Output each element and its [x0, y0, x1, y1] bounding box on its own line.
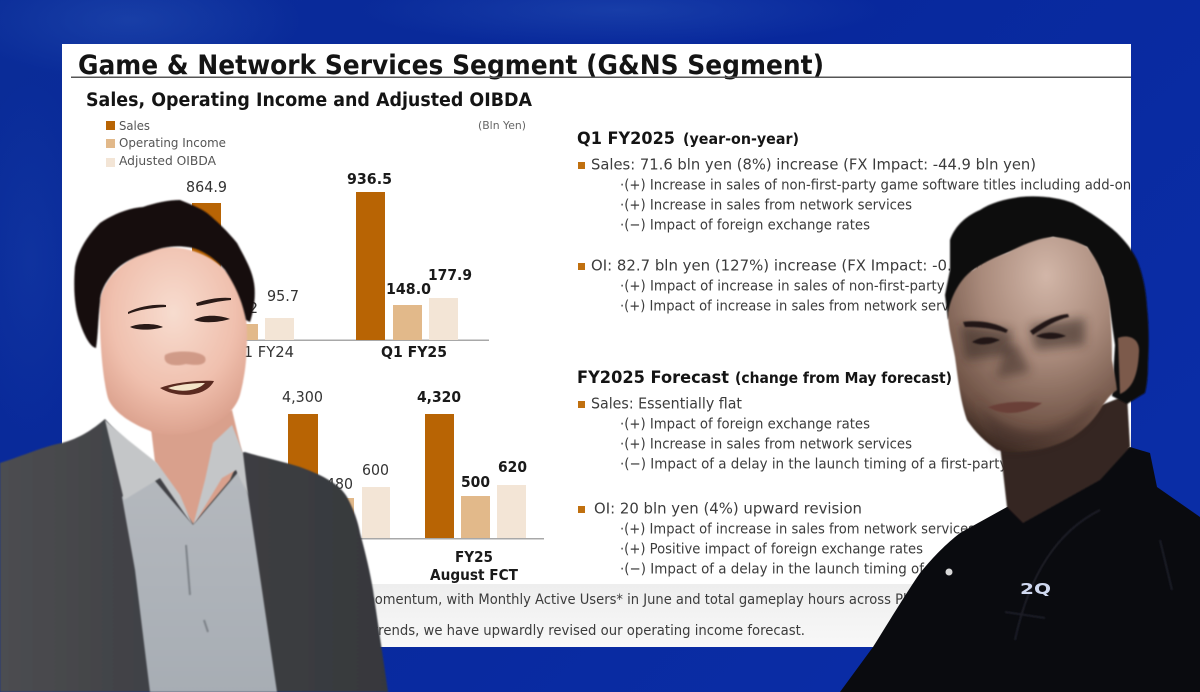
- summary box: [372, 584, 912, 640]
- shirt collar: [105, 420, 248, 526]
- forecast sales commentary: [578, 397, 1004, 472]
- eye shadow: [960, 318, 1085, 360]
- neck: [150, 410, 242, 524]
- placket: [186, 545, 208, 632]
- nose: [165, 351, 206, 365]
- Q1 operating income commentary: [578, 259, 982, 314]
- forecast operating income commentary: ·(−) Impact of a delay in the launch timing of a first-party title: [620, 562, 1038, 578]
- bar chart: full year forecast: 600: [362, 461, 389, 479]
- bar chart: quarterly: 148.0: [386, 280, 431, 298]
- forecast sales commentary: ·(−) Impact of a delay in the launch timing of a first-party title: [620, 456, 1038, 472]
- face: [948, 237, 1117, 452]
- mouth: [988, 402, 1042, 413]
- chart legend: Adjusted OIBDA: [119, 153, 216, 168]
- Q1 sales commentary: ·(+) Increase in sales of non-first-party game software titles including add-ons: [620, 178, 1138, 194]
- forecast sales commentary: ·(+) Impact of foreign exchange rates: [620, 416, 870, 432]
- bar chart: quarterly: 65.2: [225, 299, 258, 317]
- slide title: Game & Network Services Segment (G&NS Segment): [78, 50, 824, 81]
- bar chart: quarterly: 95.7: [267, 287, 299, 305]
- face: [100, 247, 247, 434]
- bar chart: full year forecast: 4,320: [417, 388, 461, 406]
- Q1 sales commentary: ·(+) Increase in sales from network services: [620, 198, 912, 214]
- lower face stubble shadow: [975, 395, 1100, 449]
- forecast operating income commentary: [578, 502, 974, 576]
- chart legend: Operating Income: [119, 135, 226, 150]
- bar chart: full year forecast: 480: [326, 475, 353, 493]
- forecast sales commentary: Sales: Essentially flat: [591, 394, 742, 412]
- chart legend: [106, 118, 226, 168]
- Q1 sales commentary: Sales: 71.6 bln yen (8%) increase (FX Impact: -44.9 bln yen): [591, 156, 1036, 174]
- slide panel: [62, 44, 1138, 647]
- hair: [945, 196, 1149, 404]
- chart legend: Sales: [119, 118, 150, 133]
- forecast operating income commentary: ·(+) Impact of increase in sales from network services: [620, 522, 975, 538]
- bar chart: quarterly: 936.5: [347, 170, 392, 188]
- brows and eyes: [128, 298, 231, 330]
- Q1 operating income commentary: OI: 82.7 bln yen (127%) increase (FX Impact: -0.7 bln yen): [591, 256, 1027, 274]
- Q1 operating income commentary: ·(+) Impact of increase in sales from network services: [620, 298, 975, 314]
- bar chart: quarterly: Q1 FY25: [381, 343, 447, 361]
- forecast operating income commentary: OI: 20 bln yen (4%) upward revision: [594, 500, 862, 518]
- Q1 operating income commentary: ·(+) Impact of increase in sales of non-first-party game software titles: [620, 278, 1085, 294]
- right portrait: man in black jacket: [840, 196, 1200, 692]
- bar chart: full year forecast: August FCT: [430, 566, 518, 584]
- summary box: trends, we have upwardly revised our operating income forecast.: [373, 623, 805, 639]
- Q1 sales commentary: ·(−) Impact of foreign exchange rates: [620, 218, 870, 234]
- shirt: [122, 470, 277, 692]
- eyes and brows: [963, 314, 1069, 344]
- hair: [74, 200, 255, 348]
- bar chart: full year forecast: 4,300: [282, 388, 323, 406]
- unit note: (Bln Yen): [478, 120, 526, 132]
- heading: FY2025 forecast: FY2025 Forecast: [577, 368, 729, 387]
- bar chart: full year forecast: [282, 391, 544, 583]
- black jacket: [840, 447, 1200, 692]
- bar chart: full year forecast: 620: [498, 458, 527, 476]
- bar chart: full year forecast: FY25: [455, 548, 493, 566]
- heading: Q1 FY2025: (year-on-year): [683, 130, 799, 148]
- smile: [160, 381, 214, 395]
- bar chart: quarterly: [187, 173, 489, 359]
- bar chart: quarterly: 864.9: [186, 178, 227, 196]
- blazer: [0, 419, 388, 692]
- nose shadow: [996, 345, 1030, 378]
- neck: [1000, 395, 1130, 523]
- bar chart: full year forecast: 500: [461, 473, 490, 491]
- chart heading: Sales, Operating Income and Adjusted OIBDA: [86, 90, 533, 111]
- summary box: momentum, with Monthly Active Users* in June and total gameplay hours across PlayStation: [362, 592, 969, 608]
- heading: FY2025 forecast: (change from May forecast): [735, 369, 952, 387]
- bar chart: quarterly: Q1 FY24: [232, 343, 294, 361]
- jacket button: [946, 568, 952, 576]
- jacket highlights: [1005, 510, 1172, 640]
- bar chart: quarterly: 177.9: [428, 266, 472, 284]
- jacket logo: 2Q: [1020, 580, 1051, 598]
- forecast operating income commentary: ·(+) Positive impact of foreign exchange rates: [620, 542, 923, 558]
- forecast sales commentary: ·(+) Increase in sales from network services: [620, 436, 912, 452]
- Q1 sales commentary: [578, 156, 1138, 234]
- left portrait: man in grey blazer: [0, 200, 388, 692]
- heading: Q1 FY2025: Q1 FY2025: [577, 129, 675, 148]
- ear: [1118, 337, 1139, 394]
